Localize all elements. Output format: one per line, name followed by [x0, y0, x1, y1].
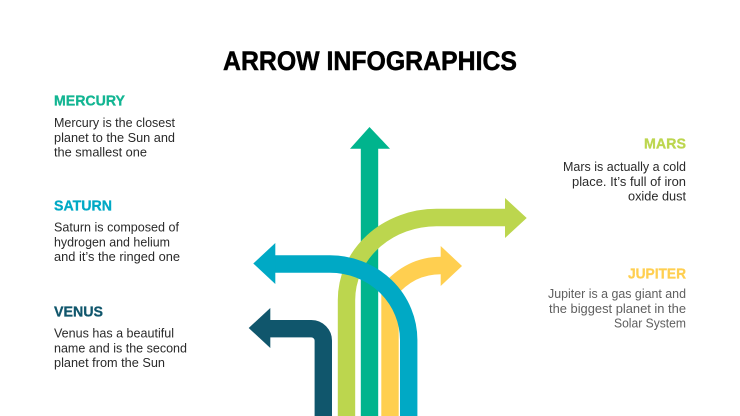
- arrow: green up: [350, 127, 390, 416]
- text block: Mercury: [54, 93, 176, 160]
- text block: Saturn: SATURN: [54, 198, 112, 215]
- text block: Mercury: planet to the Sun and: [54, 131, 175, 145]
- text block: Venus: VENUS: [54, 304, 103, 321]
- text block: Jupiter: Jupiter is a gas giant and: [548, 287, 686, 301]
- text block: Venus: planet from the Sun: [54, 356, 165, 370]
- text block: Venus: [54, 304, 187, 370]
- text block: Saturn: and it’s the ringed one: [54, 250, 180, 264]
- text block: Jupiter: Solar System: [614, 317, 686, 331]
- text block: Mercury: the smallest one: [54, 146, 147, 160]
- text block: Saturn: hydrogen and helium: [54, 236, 170, 250]
- text block: Mercury: MERCURY: [54, 93, 125, 110]
- arrow: blue left: [253, 243, 409, 416]
- text block: Jupiter: the biggest planet in the: [549, 302, 686, 316]
- text block: Mars: Mars is actually a cold: [563, 160, 686, 174]
- arrow: yellow right: [388, 246, 462, 416]
- text block: Jupiter: [548, 266, 686, 331]
- text block: Saturn: [54, 198, 180, 264]
- text block: Mercury: Mercury is the closest: [54, 116, 176, 130]
- arrow: dark teal left: [249, 308, 323, 416]
- arrow: lime right: [346, 198, 527, 416]
- text block: Jupiter: JUPITER: [628, 266, 686, 283]
- title: ARROW INFOGRAPHICS: [223, 46, 517, 76]
- text block: Saturn: Saturn is composed of: [54, 221, 180, 235]
- text block: Mars: [563, 136, 687, 204]
- text block: Venus: Venus has a beautiful: [54, 327, 174, 341]
- text block: Venus: name and is the second: [54, 341, 187, 355]
- text block: Mars: MARS: [644, 136, 686, 153]
- text block: Mars: oxide dust: [628, 190, 687, 204]
- text block: Mars: place. It’s full of iron: [572, 175, 686, 189]
